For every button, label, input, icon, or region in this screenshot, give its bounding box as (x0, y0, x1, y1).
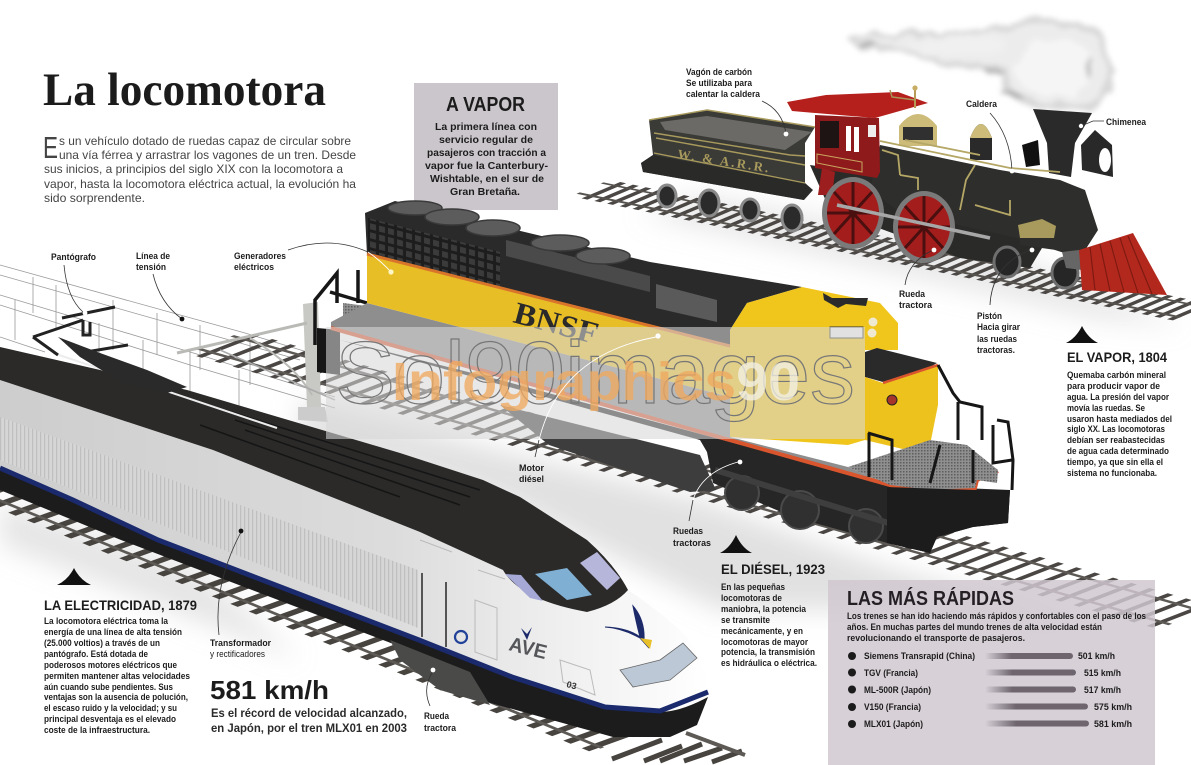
body text: locomotoras de mayor (721, 637, 808, 648)
block: El vapor (1066, 326, 1172, 479)
short hood stripe (883, 365, 938, 383)
body text: es hidráulica o eléctrica. (721, 658, 817, 669)
bogie (390, 640, 490, 705)
speed row: MLX01: 581 km/h (1094, 719, 1132, 730)
smokestack (1033, 109, 1092, 177)
windshield (505, 552, 620, 601)
body text: La locomotora eléctrica toma la (44, 616, 169, 627)
panel: A VAPOR: pasajeros con tracción a (427, 148, 546, 159)
intro paragraph: s un vehículo dotado de ruedas capaz de circular sobre (59, 134, 351, 148)
side walkway (331, 303, 890, 485)
cylinder box (1018, 219, 1056, 250)
hood vent (506, 240, 650, 292)
headlights (868, 318, 878, 338)
headlight (620, 643, 697, 687)
diesel locomotive (315, 201, 1013, 553)
speed row: Transrapid: Siemens Transrapid (China) (864, 651, 975, 662)
horn (823, 293, 868, 308)
piston rod (837, 205, 990, 238)
label: Motor diésel: diésel (519, 474, 544, 485)
number 03: 03 (566, 679, 578, 691)
label: Transformador y rectificadores: Transformador (210, 638, 271, 649)
front plate (848, 440, 998, 490)
intro paragraph: E (43, 130, 58, 165)
steam railway track (578, 183, 1191, 317)
orange stripe (331, 328, 998, 491)
label: Pistón (977, 248, 1034, 356)
watermark: Infographics 90 (392, 352, 800, 412)
label: Vagón de carbón: Se utilizaba para (686, 78, 753, 89)
record speed callout: en Japón, por el tren MLX01 en 2003 (211, 721, 407, 735)
dark hood (365, 201, 802, 347)
body text: maniobra, la potencia (721, 604, 807, 615)
train body (0, 380, 710, 712)
domes (890, 85, 992, 160)
body text: usaron hasta mediados del (1067, 414, 1172, 425)
BNSF lettering: BNSF (510, 295, 602, 351)
overhead line wires (0, 265, 340, 418)
rear stair (343, 303, 367, 328)
label: Ruedas tractoras, diesel: Ruedas (673, 526, 703, 537)
intro paragraph (43, 130, 356, 205)
body text: sistema no funcionaba. (1067, 468, 1157, 479)
speed row: V150: 575 km/h (1094, 702, 1132, 713)
label: Vagón de carbón (686, 67, 788, 136)
intro paragraph: una vía férrea y arrastrar los vagones de un tren. Desde (59, 148, 356, 162)
body text: tiempo, ya que sin ella el (1067, 457, 1163, 468)
body text: para producir vapor de (1067, 381, 1160, 392)
hood box (656, 284, 717, 322)
body text (44, 616, 190, 736)
speed row: ML-500R: 517 km/h (1084, 685, 1121, 696)
panel: A VAPOR: vapor fue la Canterbury- (425, 161, 548, 172)
heading: LAS MÁS RÁPIDAS (847, 587, 1014, 610)
body text: coste de la infraestructura. (44, 725, 150, 736)
label: Transformador y rectificadores (210, 529, 271, 660)
head lamp (1081, 130, 1113, 177)
speed row: MLX01 (848, 719, 1132, 730)
body text: Quemaba carbón mineral (1067, 370, 1166, 381)
record speed callout: 581 km/h (210, 675, 329, 705)
ground shadows (0, 195, 1185, 660)
roof rod (53, 353, 277, 428)
emblem (455, 631, 467, 643)
label: Pistón: las ruedas (977, 334, 1017, 345)
panel: A VAPOR: Gran Bretaña. (450, 187, 520, 198)
label: Rueda tractora, electric (424, 668, 457, 734)
steam smoke (845, 15, 1115, 110)
heading: LA ELECTRICIDAD, 1879 (44, 597, 197, 613)
short hood top (865, 348, 937, 382)
label: Línea de tensión: tensión (136, 262, 166, 273)
label: Caldera (966, 99, 1014, 173)
tender: W. & A.R.R. (677, 146, 770, 175)
icon: triangle (720, 535, 752, 553)
diesel railway track (199, 336, 1191, 624)
bell (1022, 140, 1040, 167)
speed row: ML-500R: ML-500R (Japón) (864, 685, 931, 696)
intro text: años. En muchas partes del mundo trenes de alta velocidad están (847, 622, 1102, 633)
rear handrails (315, 270, 367, 345)
label: Generadores eléctricos: eléctricos (234, 262, 274, 273)
body text: mecánicamente, y en (721, 626, 803, 637)
V nose logo (605, 606, 652, 649)
body text: el escaso ruido y la velocidad; y su (44, 703, 177, 714)
speed row: Transrapid (848, 651, 1115, 662)
body text: locomotoras de (721, 593, 782, 604)
body text: principal desventaja es el elevado (44, 714, 176, 725)
speed row: Transrapid: 501 km/h (1078, 651, 1115, 662)
label: Rueda tractora, steam: tractora (899, 300, 933, 311)
tender (641, 110, 815, 200)
bogies (715, 470, 895, 543)
intro paragraph: sido sorprendente. (44, 191, 145, 205)
boiler (870, 145, 1098, 258)
body text: agua. La presión del vapor (1067, 392, 1169, 403)
block: El diésel (720, 535, 825, 669)
intro paragraph: sus inicios, a principios del siglo XIX con la locomotora a (44, 162, 343, 176)
record speed callout: Es el récord de velocidad alcanzado, (211, 706, 407, 720)
label: Pantógrafo: Pantógrafo (51, 252, 96, 263)
catenary pole (177, 302, 335, 422)
body text: movía las ruedas. Se (1067, 403, 1145, 414)
chassis (810, 165, 1045, 268)
label: Vagón de carbón: Vagón de carbón (686, 67, 752, 78)
cab (787, 92, 928, 195)
panel: A VAPOR: servicio regular de (439, 135, 533, 146)
body text (721, 582, 817, 669)
fuel tank (500, 405, 716, 492)
body text: (25.000 voltios) a través de un (44, 638, 160, 649)
speed row: V150 (848, 702, 1132, 713)
label: Generadores eléctricos (234, 243, 394, 275)
label: Chimenea (1079, 117, 1147, 128)
front frame (887, 487, 1010, 553)
hood stripe (367, 254, 730, 346)
cooling fans (388, 201, 630, 264)
cab window (830, 327, 863, 338)
warning beacon (887, 395, 897, 405)
cowcatcher (1062, 233, 1167, 295)
label: Caldera: Caldera (966, 99, 998, 110)
tender wheels (658, 185, 802, 231)
ribbed roof section (200, 410, 480, 505)
panel: A VAPOR: Wishtable, en el sur de (430, 174, 544, 185)
intro text: Los trenes se han ido haciendo más rápidos y confortables con el paso de los (847, 611, 1146, 622)
electric railway track (0, 472, 634, 748)
intro text: revolucionando el transporte de pasajeros. (847, 633, 1025, 644)
panel: A VAPOR: La primera línea con (435, 122, 537, 133)
steam locomotive (641, 85, 1167, 295)
door lines (422, 573, 446, 647)
heading: EL VAPOR, 1804 (1067, 349, 1167, 365)
speed row: MLX01: MLX01 (Japón) (864, 719, 923, 730)
speed row: ML-500R (848, 685, 1121, 696)
body text: siglo XX. Las locomotoras (1067, 424, 1165, 435)
body text: potencia, la transmisión (721, 647, 815, 658)
underframe (340, 340, 1010, 553)
watermark: Sol90images (335, 323, 855, 422)
panel: A VAPOR (414, 83, 558, 210)
roof (0, 347, 628, 612)
pantograph (33, 307, 187, 393)
speed row: V150: V150 (Francia) (864, 702, 921, 713)
golden pipes (880, 140, 1060, 215)
small wheels (994, 247, 1078, 288)
icon: triangle (57, 568, 91, 585)
title: La locomotora (43, 64, 326, 116)
body text (1067, 370, 1172, 479)
body text: aún cuando sube pendientes. Sus (44, 682, 173, 693)
intro text (847, 611, 1146, 644)
icon: triangle (1066, 326, 1098, 343)
body text: de agua cada determinado (1067, 446, 1169, 457)
speed row: TGV: TGV (Francia) (864, 668, 918, 679)
body text: debían ser reabastecidas (1067, 435, 1165, 446)
label: Rueda tractora, steam (899, 248, 936, 311)
label: Generadores eléctricos: Generadores (234, 251, 286, 262)
label: Vagón de carbón: calentar la caldera (686, 89, 761, 100)
underbody (0, 465, 708, 737)
side vent mesh (0, 417, 418, 628)
record speed callout (210, 675, 407, 735)
label: Línea de tensión (136, 251, 184, 321)
label: Motor diésel: Motor (519, 463, 544, 474)
label: Ruedas tractoras, diesel (673, 460, 742, 549)
electric track, foreground end (612, 733, 745, 762)
rear step block (317, 328, 340, 375)
short hood yellow (865, 365, 938, 455)
electric train (0, 307, 710, 737)
heading: EL DIÉSEL, 1923 (721, 561, 825, 577)
body text: En las pequeñas (721, 582, 785, 593)
body text: se transmite (721, 615, 770, 626)
panel outlines (420, 540, 595, 695)
label: Pistón: tractoras. (977, 345, 1015, 356)
body text: ventajas son la ausencia de polución, (44, 692, 188, 703)
driving wheels (822, 177, 955, 263)
yellow hood side (367, 253, 730, 397)
speed row: TGV: 515 km/h (1084, 668, 1121, 679)
body text: poderosos motores eléctricos que (44, 660, 177, 671)
cab (730, 287, 898, 445)
label: Rueda tractora, steam: Rueda (899, 289, 926, 300)
label: Ruedas tractoras, diesel: tractoras (673, 538, 711, 549)
front handrails (868, 365, 1013, 490)
speed row: TGV (848, 668, 1121, 679)
label: Pantógrafo (51, 252, 96, 315)
AVE logo: AVE (507, 634, 549, 664)
label: Chimenea: Chimenea (1106, 117, 1147, 128)
label: Pistón: Pistón (977, 311, 1002, 322)
label: Rueda tractora, electric: tractora (424, 723, 457, 734)
label: Rueda tractora, electric: Rueda (424, 711, 450, 722)
block: La electricidad (44, 568, 197, 736)
intro paragraph: vapor, hasta la locomotora eléctrica actual, la evolución ha (44, 177, 356, 191)
panel: Las más rápidas (828, 580, 1155, 765)
panel: A VAPOR: A VAPOR (446, 94, 525, 116)
label: Transformador y rectificadores: y rectificadores (210, 649, 265, 660)
body text: permiten mantener altas velocidades (44, 671, 190, 682)
label: Pistón: Hacia girar (977, 322, 1020, 333)
body text: energía de una línea de alta tensión (44, 627, 182, 638)
body text: pantógrafo. Está dotada de (44, 649, 148, 660)
label: Línea de tensión: Línea de (136, 251, 170, 262)
blue stripe (0, 468, 708, 711)
radiator grid (368, 218, 500, 288)
label: Motor diésel (519, 333, 661, 485)
